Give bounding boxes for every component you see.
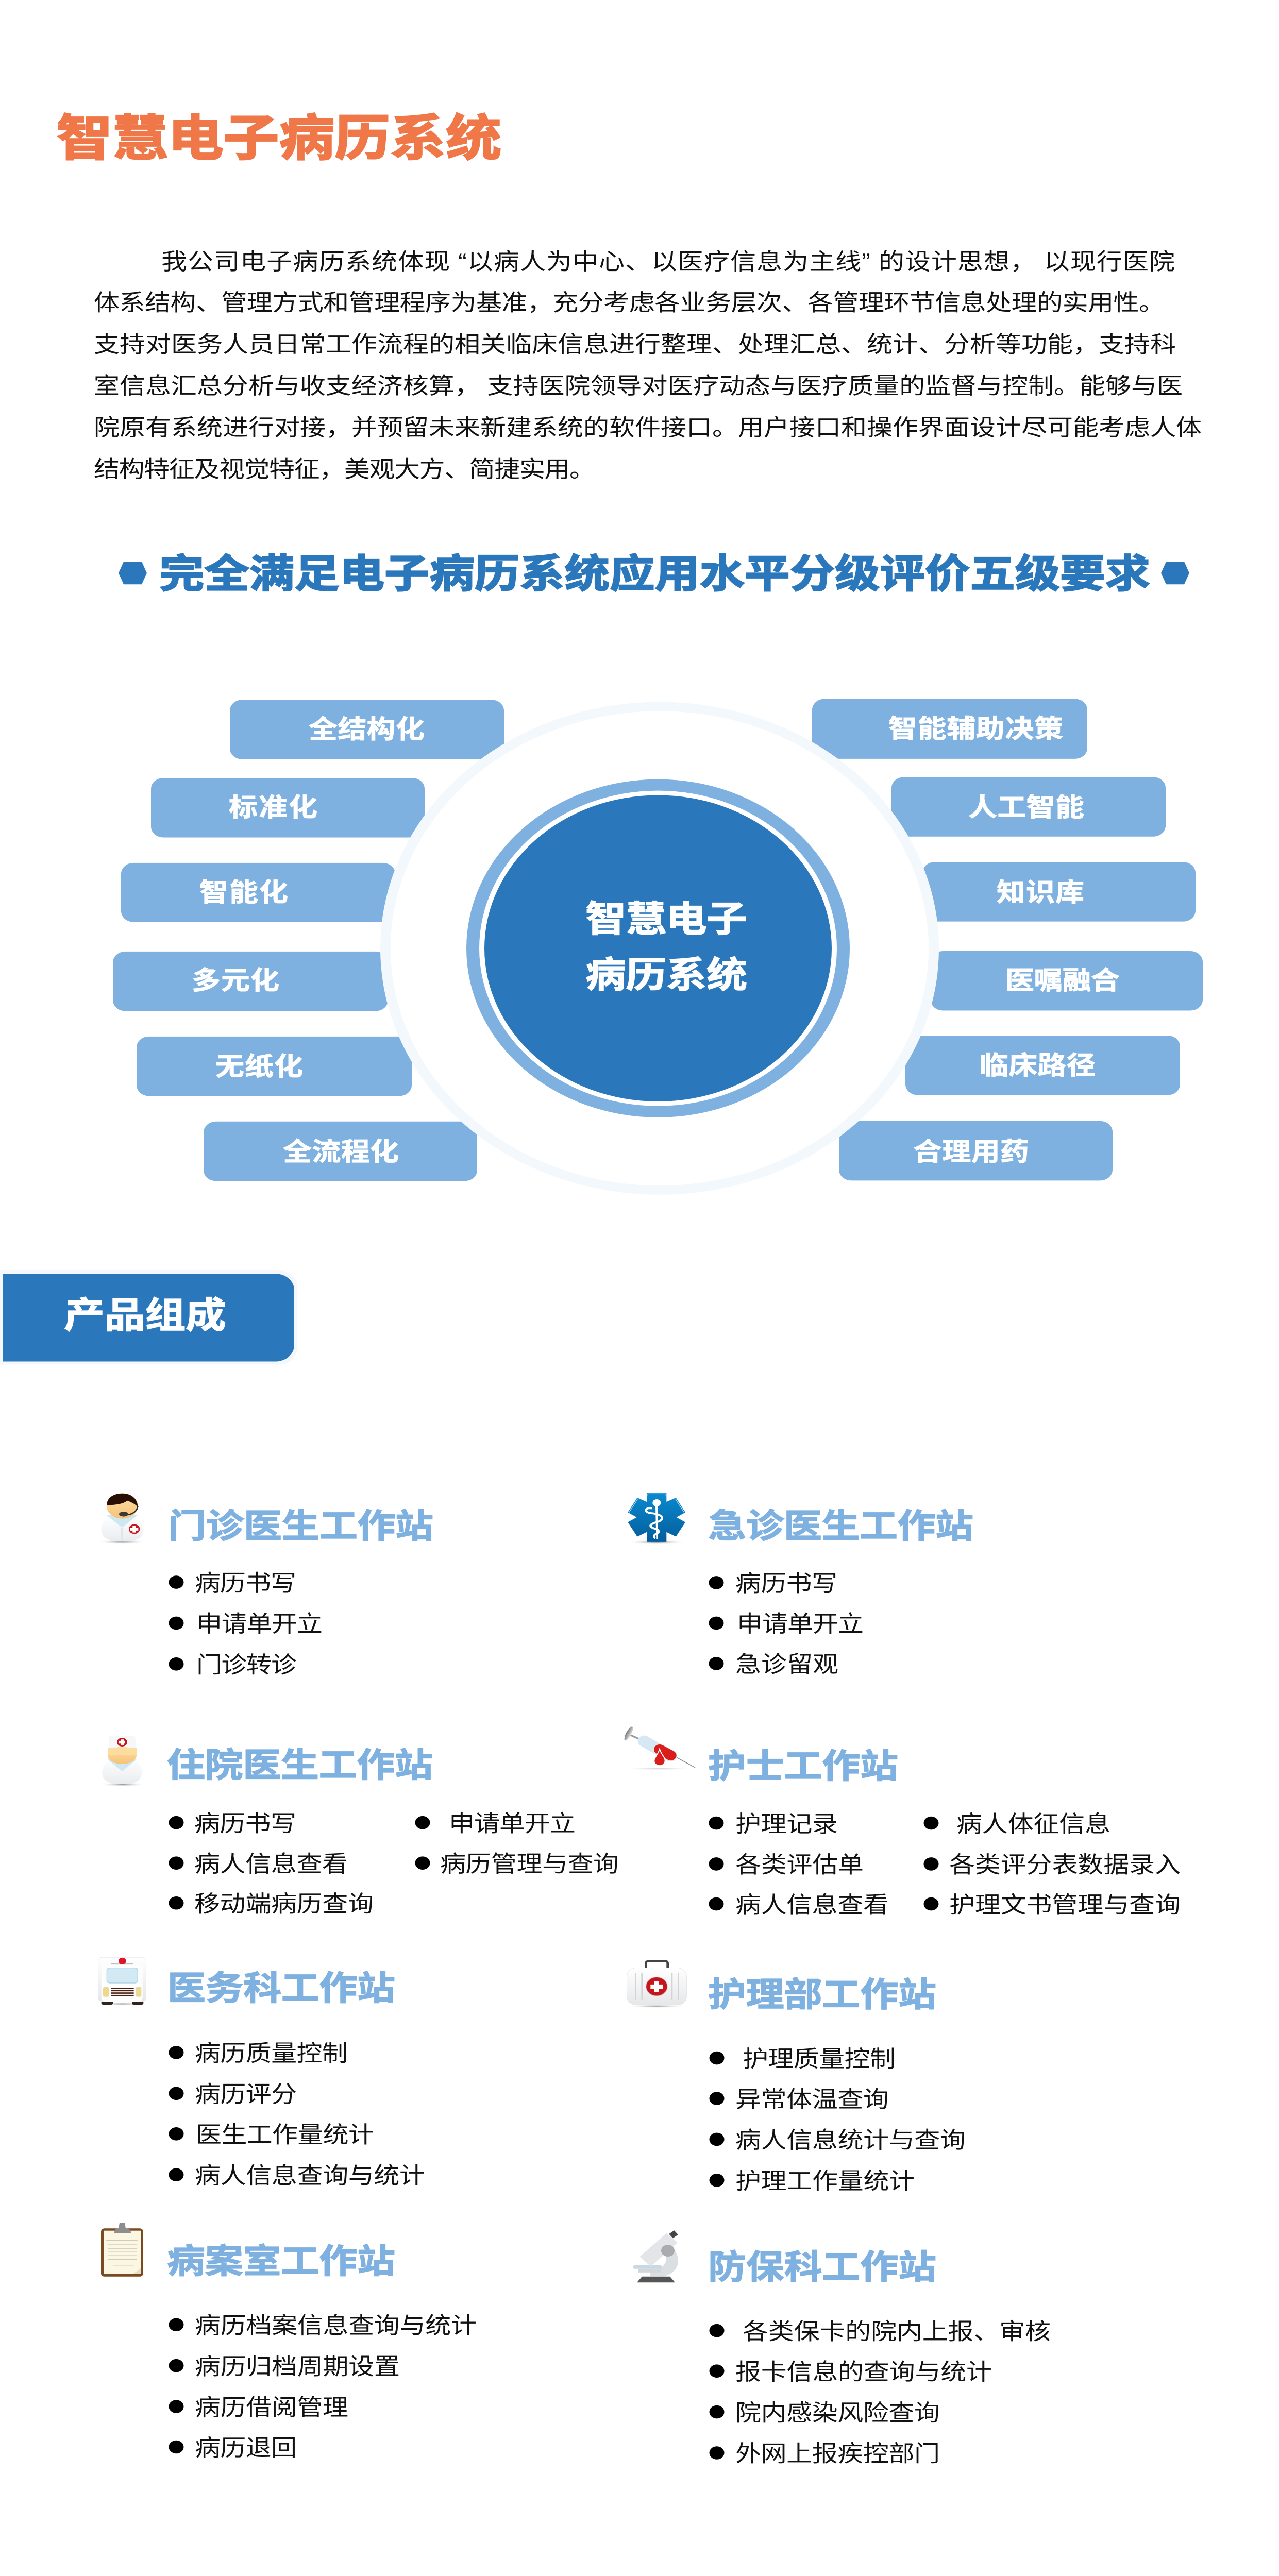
list: 急诊留观 <box>735 1651 838 1677</box>
feature: 人工智能 <box>891 777 1166 837</box>
section tab: 产品组成 <box>0 1270 297 1365</box>
list: 病历归档周期设置 <box>195 2353 400 2379</box>
list: 院内感染风险查询 <box>735 2400 940 2426</box>
list: 医生工作量统计 <box>196 2122 374 2147</box>
list: 报卡信息的查询与统计 <box>735 2359 992 2384</box>
feature: 无纸化: 无纸化 <box>215 1053 303 1081</box>
heading: 防保科工作站 <box>708 2248 936 2286</box>
subheading with hexagon markers: 完全满足电子病历系统应用水平分级评价五级要求 <box>159 552 1150 596</box>
heading: 医务科工作站 <box>167 1970 395 2007</box>
list: 病人体征信息 <box>956 1811 1110 1837</box>
feature: 人工智能: 人工智能 <box>968 793 1084 822</box>
list: 各类保卡的院内上报、审核 <box>743 2318 1051 2344</box>
list: 病历借阅管理 <box>195 2395 348 2420</box>
intro paragraph <box>94 249 1202 482</box>
feature: 多元化: 多元化 <box>192 967 279 995</box>
intro paragraph: 院原有系统进行对接，并预留未来新建系统的软件接口。用户接口和操作界面设计尽可能考虑人体 <box>94 415 1202 440</box>
panel: 医务科工作站 <box>98 1957 425 2188</box>
feature: 合理用药 <box>839 1121 1113 1180</box>
list <box>169 2313 477 2461</box>
list: 病人信息统计与查询 <box>735 2127 966 2153</box>
panel: 护士工作站 <box>622 1726 1181 1918</box>
feature: 医嘱融合: 医嘱融合 <box>1005 967 1120 995</box>
heading: 门诊医生工作站 <box>168 1507 433 1545</box>
list: 护理质量控制 <box>743 2046 896 2072</box>
feature: 全流程化: 全流程化 <box>283 1138 399 1166</box>
panel: 门诊医生工作站 <box>98 1493 433 1677</box>
list: 护理记录 <box>735 1811 838 1837</box>
list <box>169 1570 323 1677</box>
feature: 临床路径: 临床路径 <box>980 1052 1096 1080</box>
outer halo ring <box>385 706 934 1190</box>
list <box>709 2318 1051 2466</box>
core circle <box>466 779 850 1117</box>
list <box>709 1571 864 1677</box>
feature: 全结构化: 全结构化 <box>309 715 425 744</box>
list: 各类评估单 <box>735 1852 864 1877</box>
feature: 知识库 <box>922 862 1196 922</box>
feature: 无纸化 <box>137 1037 412 1096</box>
feature: 合理用药: 合理用药 <box>913 1138 1029 1166</box>
list: 门诊转诊 <box>196 1652 297 1677</box>
panel: 防保科工作站 <box>633 2232 1051 2466</box>
feature: 医嘱融合 <box>931 951 1203 1011</box>
feature: 智能化 <box>121 863 395 922</box>
icon: star of life <box>628 1493 686 1544</box>
icon: nurse <box>100 1736 145 1787</box>
list: 病历书写 <box>194 1810 296 1836</box>
feature: 多元化 <box>113 952 388 1011</box>
panel: 护理部工作站 <box>627 1961 966 2194</box>
list <box>709 1811 1181 1918</box>
list <box>169 2040 425 2188</box>
intro paragraph: 结构特征及视觉特征，美观大方、简捷实用。 <box>94 456 595 482</box>
list: 病历质量控制 <box>195 2040 348 2066</box>
feature: 全结构化 <box>230 700 504 759</box>
intro paragraph: 我公司电子病历系统体现 “以病人为中心、以医疗信息为主线” 的设计思想， 以现行医院 <box>161 249 1175 274</box>
list: 异常体温查询 <box>735 2087 889 2112</box>
diagram: core system and features <box>113 699 1203 1190</box>
intro paragraph: 体系结构、管理方式和管理程序为基准，充分考虑各业务层次、各管理环节信息处理的实用性。 <box>94 290 1165 315</box>
icon: microscope <box>633 2232 678 2282</box>
list: 护理文书管理与查询 <box>949 1892 1181 1918</box>
heading: 住院医生工作站 <box>167 1747 433 1784</box>
heading: 急诊医生工作站 <box>708 1507 973 1545</box>
list: 病历书写 <box>195 1570 296 1596</box>
list <box>169 1810 619 1917</box>
panel: 住院医生工作站 <box>100 1736 619 1917</box>
icon: doctor with headset <box>98 1493 146 1544</box>
feature: 智能化: 智能化 <box>199 878 288 907</box>
intro paragraph: 支持对医务人员日常工作流程的相关临床信息进行整理、处理汇总、统计、分析等功能，支持科 <box>94 331 1176 357</box>
list: 病历评分 <box>195 2081 297 2107</box>
heading: 护理部工作站 <box>708 1976 936 2013</box>
list: 申请单开立 <box>196 1611 323 1637</box>
list: 病历管理与查询 <box>440 1851 619 1876</box>
icon: clipboard <box>101 2223 143 2277</box>
section tab: 产品组成: 产品组成 <box>64 1295 226 1335</box>
heading: 病案室工作站 <box>167 2243 395 2280</box>
feature: 临床路径 <box>905 1036 1180 1095</box>
list: 病人信息查询与统计 <box>195 2163 425 2188</box>
feature: 全流程化 <box>204 1122 477 1181</box>
list: 护理工作量统计 <box>735 2168 915 2194</box>
heading: 护士工作站 <box>708 1747 898 1785</box>
intro paragraph: 室信息汇总分析与收支经济核算， 支持医院领导对医疗动态与医疗质量的监督与控制。能够与医 <box>94 373 1183 398</box>
list: 申请单开立 <box>737 1611 864 1637</box>
title: 智慧电子病历系统 <box>57 111 501 166</box>
list: 各类评分表数据录入 <box>949 1852 1181 1877</box>
panel: 急诊医生工作站 <box>628 1493 973 1677</box>
list: 病历档案信息查询与统计 <box>195 2313 477 2338</box>
feature: 智能辅助决策: 智能辅助决策 <box>888 715 1063 743</box>
list <box>709 2046 966 2194</box>
feature: 知识库: 知识库 <box>997 878 1084 907</box>
list: 病人信息查看 <box>194 1851 348 1876</box>
icon: medical kit <box>627 1961 687 2008</box>
feature: 智能辅助决策 <box>812 699 1087 759</box>
feature: 标准化 <box>151 778 425 838</box>
feature: 标准化: 标准化 <box>229 793 317 822</box>
core circle: 智慧电子 <box>585 899 747 939</box>
icon: ambulance <box>98 1957 146 2006</box>
list: 病人信息查看 <box>735 1892 889 1918</box>
panel: 病案室工作站 <box>101 2223 477 2461</box>
icon: syringe <box>622 1726 696 1770</box>
core circle: 病历系统 <box>585 955 747 995</box>
list: 外网上报疾控部门 <box>735 2441 940 2466</box>
list: 病历书写 <box>735 1571 837 1596</box>
list: 移动端病历查询 <box>194 1891 374 1917</box>
list: 申请单开立 <box>449 1810 576 1836</box>
list: 病历退回 <box>195 2435 297 2461</box>
